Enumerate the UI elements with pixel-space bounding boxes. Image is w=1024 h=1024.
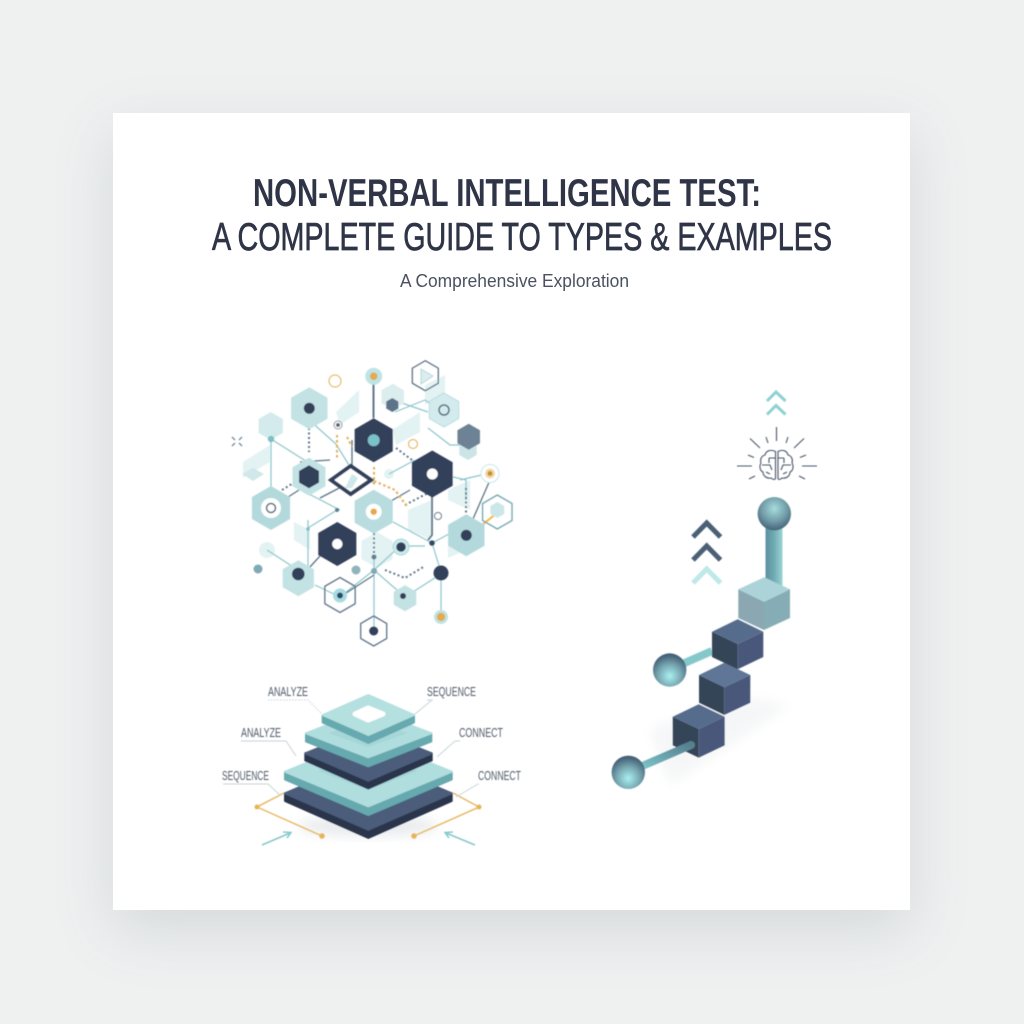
stack labels: SEQUENCE — [427, 684, 476, 699]
network connecting lines — [267, 400, 490, 630]
stack labels: CONNECT — [459, 725, 503, 740]
cube 2 — [712, 619, 763, 669]
stack labels: ANALYZE — [241, 725, 281, 740]
hexagon nodes — [252, 361, 512, 646]
sphere top — [758, 497, 791, 530]
gold link — [482, 513, 497, 525]
teal layer upper — [306, 709, 431, 766]
crosshair mark — [232, 437, 242, 446]
lower rod — [640, 745, 691, 767]
stack labels: CONNECT — [478, 768, 521, 783]
network dotted lines — [282, 428, 466, 578]
network circles — [254, 368, 499, 636]
stack labels: ANALYZE — [268, 684, 308, 699]
chevrons top — [767, 392, 786, 414]
top layer — [323, 695, 414, 743]
ascending cube staircase — [612, 392, 817, 789]
card panel — [113, 113, 910, 910]
cube 4 — [673, 704, 725, 758]
teal layer — [285, 738, 452, 815]
sphere bottom — [612, 756, 645, 789]
hexagon network diagram — [232, 361, 512, 646]
title — [212, 172, 832, 259]
middle rod — [680, 651, 712, 665]
subtitle: A Comprehensive Exploration — [400, 271, 629, 291]
top cube — [738, 577, 790, 630]
stair shadows — [650, 695, 790, 785]
cube 3 — [699, 663, 750, 715]
layered stack diagram — [222, 684, 521, 845]
arrow right — [445, 832, 475, 845]
dark layer — [305, 728, 432, 788]
gold connector lines — [257, 793, 479, 836]
upper rod — [766, 525, 782, 587]
network dark lines — [271, 376, 490, 597]
chevrons left — [693, 523, 720, 583]
stack labels — [222, 684, 521, 783]
gold connector dots — [254, 804, 482, 839]
stack labels: SEQUENCE — [222, 768, 269, 783]
label leader lines — [223, 700, 479, 797]
bottom dark layer — [285, 758, 452, 838]
arrow left — [262, 832, 291, 845]
icon: brain with rays — [737, 427, 817, 480]
network pale background shapes — [242, 375, 470, 568]
central diamond — [331, 466, 371, 494]
stack shadow — [298, 816, 438, 836]
title: NON-VERBAL INTELLIGENCE TEST: — [253, 172, 761, 215]
sphere middle — [653, 653, 686, 687]
network gold dotted lines — [337, 435, 408, 508]
